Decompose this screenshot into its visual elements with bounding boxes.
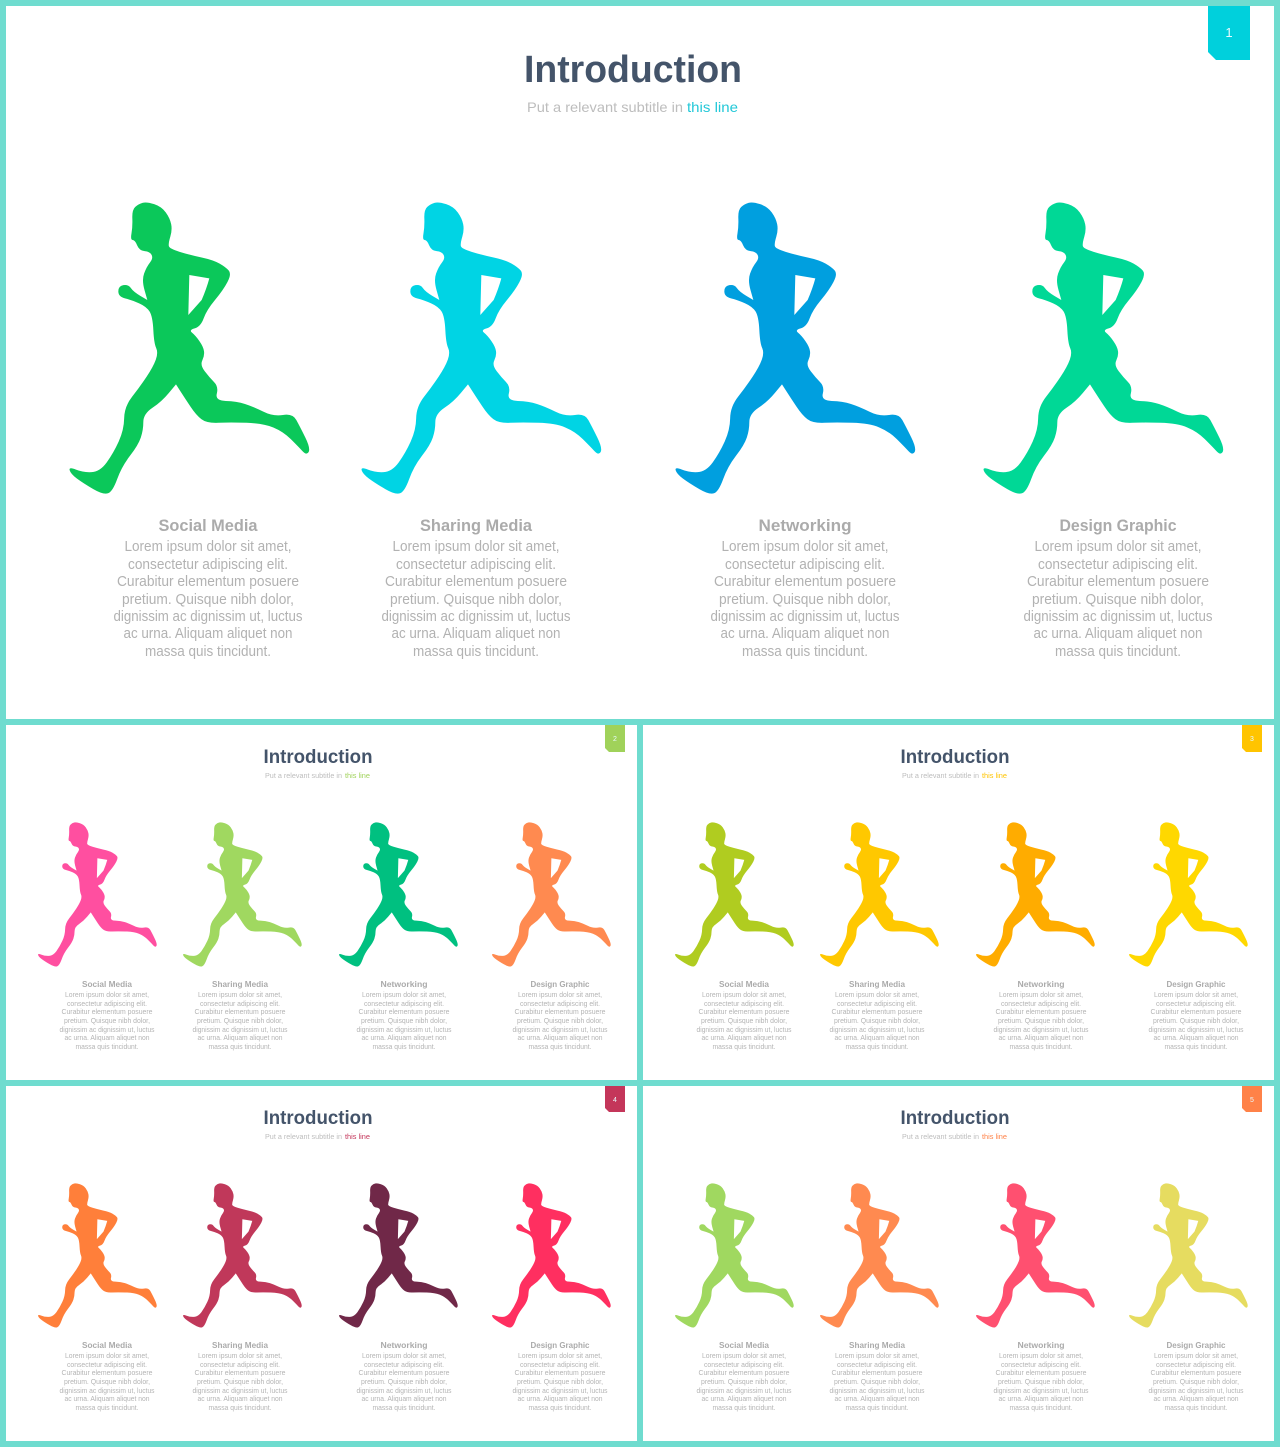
badge: slide number 2 <box>605 725 625 752</box>
text block: social media: Curabitur elementum posuere <box>698 1368 790 1377</box>
text block: networking: massa quis tincidunt. <box>1010 1403 1072 1412</box>
icon: runner social media <box>38 1183 157 1328</box>
icon: runner design graphic <box>492 1183 611 1328</box>
icon: runner sharing media <box>183 1183 302 1328</box>
text block: networking: Curabitur elementum posuere <box>714 574 896 590</box>
text block: networking <box>356 979 452 1051</box>
badge: slide number 1: 1 <box>1225 25 1233 40</box>
text block: social media: massa quis tincidunt. <box>712 1403 776 1412</box>
text block: social media <box>60 1340 155 1412</box>
text block: networking: dignissim ac dignissim ut, luctus <box>356 1025 452 1034</box>
text block: social media: ac urna. Aliquam aliquet non <box>702 1394 787 1403</box>
text block: design graphic: Design Graphic <box>1060 516 1176 535</box>
text block: networking: Lorem ipsum dolor sit amet, <box>999 990 1083 999</box>
text block: social media: Lorem ipsum dolor sit amet, <box>65 990 149 999</box>
text block: networking: Lorem ipsum dolor sit amet, <box>999 1351 1083 1360</box>
badge: slide number 4 <box>605 1086 625 1112</box>
text block: sharing media: Curabitur elementum posuere <box>194 1007 286 1016</box>
badge: slide number 2: 2 <box>613 736 617 743</box>
text block: social media: dignissim ac dignissim ut, luctus <box>114 609 302 625</box>
text block: sharing media: consectetur adipiscing elit. <box>396 557 556 573</box>
text block: sharing media: Sharing Media <box>849 1340 905 1350</box>
text block: design graphic: Lorem ipsum dolor sit amet, <box>518 990 602 999</box>
subtitle: Put a relevant subtitle in <box>265 1134 342 1141</box>
text block: sharing media: consectetur adipiscing elit. <box>837 1360 917 1369</box>
text block: sharing media: Sharing Media <box>849 979 905 989</box>
text block: design graphic <box>1024 516 1212 660</box>
text block: design graphic: massa quis tincidunt. <box>1164 1042 1228 1051</box>
text block: design graphic: dignissim ac dignissim ut, luctus <box>1148 1386 1244 1395</box>
text block: sharing media: pretium. Quisque nibh dolor, <box>197 1377 283 1386</box>
text block: sharing media: dignissim ac dignissim ut, luctus <box>192 1025 288 1034</box>
text block: networking: Networking <box>1018 1340 1064 1350</box>
text block: design graphic: Curabitur elementum posuere <box>514 1368 606 1377</box>
text block: sharing media: Lorem ipsum dolor sit amet, <box>835 990 919 999</box>
title: Introduction <box>900 747 1010 768</box>
text block: networking: dignissim ac dignissim ut, luctus <box>710 609 900 625</box>
panel: slide 5 <box>643 1086 1274 1441</box>
text block: sharing media: dignissim ac dignissim ut, luctus <box>192 1386 288 1395</box>
icon: runner social media <box>675 822 794 967</box>
icon: runner social media <box>70 202 309 494</box>
text block: social media: Lorem ipsum dolor sit amet, <box>702 990 786 999</box>
badge: slide number 1 <box>1208 6 1250 60</box>
text block: networking: ac urna. Aliquam aliquet non <box>720 626 890 642</box>
text block: sharing media: ac urna. Aliquam aliquet non <box>198 1033 283 1042</box>
text block: networking: ac urna. Aliquam aliquet non <box>998 1033 1084 1042</box>
text block: social media: pretium. Quisque nibh dolor, <box>701 1377 787 1386</box>
text block: design graphic: Curabitur elementum posuere <box>1150 1368 1242 1377</box>
subtitle: Put a relevant subtitle in <box>265 773 342 780</box>
text block: social media: massa quis tincidunt. <box>145 644 271 660</box>
text block: sharing media: Lorem ipsum dolor sit amet, <box>198 1351 282 1360</box>
text block: social media: massa quis tincidunt. <box>712 1042 776 1051</box>
text block: design graphic: Design Graphic <box>1166 1340 1226 1350</box>
text block: design graphic <box>512 979 608 1051</box>
text block: sharing media: massa quis tincidunt. <box>846 1042 908 1051</box>
icon: runner networking <box>676 202 915 494</box>
title: Introduction <box>900 1108 1010 1129</box>
text block: sharing media: ac urna. Aliquam aliquet non <box>392 626 560 642</box>
text block: social media: Social Media <box>719 979 769 989</box>
text block: social media: consectetur adipiscing elit. <box>128 557 288 573</box>
icon: runner networking <box>976 822 1095 967</box>
text block: sharing media <box>192 979 288 1051</box>
text block: social media <box>114 516 302 660</box>
text block: social media: Lorem ipsum dolor sit amet, <box>65 1351 149 1360</box>
text block: networking: Networking <box>758 516 852 535</box>
icon: runner networking <box>339 1183 458 1328</box>
text block: social media: Social Media <box>158 516 258 535</box>
text block: networking: pretium. Quisque nibh dolor, <box>998 1377 1084 1386</box>
text block: networking: consectetur adipiscing elit. <box>1001 1360 1081 1369</box>
icon: runner design graphic <box>492 822 611 967</box>
text block: social media: Social Media <box>719 1340 769 1350</box>
subtitle: this line <box>687 99 738 115</box>
text block: social media: Social Media <box>82 1340 132 1350</box>
icon: runner sharing media <box>362 202 601 494</box>
text block: design graphic: ac urna. Aliquam aliquet non <box>1154 1394 1239 1403</box>
text block: sharing media <box>192 1340 288 1412</box>
text block: sharing media: massa quis tincidunt. <box>208 1042 272 1051</box>
text block: networking: ac urna. Aliquam aliquet non <box>998 1394 1084 1403</box>
text block: social media: dignissim ac dignissim ut, luctus <box>696 1025 792 1034</box>
text block: design graphic: Lorem ipsum dolor sit amet, <box>1034 539 1202 555</box>
text block: social media <box>696 1340 792 1412</box>
text block: sharing media: ac urna. Aliquam aliquet non <box>834 1033 920 1042</box>
text block: networking: massa quis tincidunt. <box>372 1403 436 1412</box>
icon: runner design graphic <box>1129 1183 1248 1328</box>
text block: social media: Lorem ipsum dolor sit amet, <box>124 539 292 555</box>
icon: runner design graphic <box>1129 822 1248 967</box>
text block: networking <box>710 516 900 660</box>
text block: networking: massa quis tincidunt. <box>372 1042 436 1051</box>
text block: networking: consectetur adipiscing elit. <box>1001 999 1081 1008</box>
text block: design graphic: dignissim ac dignissim ut, luctus <box>512 1025 608 1034</box>
text block: networking: Curabitur elementum posuere <box>996 1368 1086 1377</box>
subtitle: Put a relevant subtitle in <box>902 773 979 780</box>
text block: sharing media: Sharing Media <box>212 979 268 989</box>
icon: runner networking <box>976 1183 1095 1328</box>
text block: networking: Lorem ipsum dolor sit amet, <box>722 539 888 555</box>
text block: social media: Curabitur elementum posuere <box>117 574 299 590</box>
text block: design graphic: ac urna. Aliquam aliquet non <box>518 1033 603 1042</box>
text block: design graphic: dignissim ac dignissim ut, luctus <box>1024 609 1212 625</box>
text block: design graphic: ac urna. Aliquam aliquet non <box>518 1394 603 1403</box>
text block: design graphic: Design Graphic <box>530 979 590 989</box>
text block: design graphic: Curabitur elementum posuere <box>514 1007 606 1016</box>
text block: networking: dignissim ac dignissim ut, luctus <box>994 1025 1089 1034</box>
text block: networking: dignissim ac dignissim ut, luctus <box>356 1386 452 1395</box>
text block: networking: ac urna. Aliquam aliquet non <box>362 1033 447 1042</box>
text block: networking: Curabitur elementum posuere <box>358 1007 450 1016</box>
text block: sharing media: Curabitur elementum posuere <box>194 1368 286 1377</box>
text block: design graphic: pretium. Quisque nibh dolor, <box>1032 592 1204 608</box>
text block: design graphic: massa quis tincidunt. <box>528 1403 592 1412</box>
badge: slide number 3: 3 <box>1250 736 1254 743</box>
text block: networking: Lorem ipsum dolor sit amet, <box>362 990 446 999</box>
icon: runner design graphic <box>984 202 1223 494</box>
text block: sharing media: dignissim ac dignissim ut, luctus <box>382 609 570 625</box>
text block: sharing media: pretium. Quisque nibh dolor, <box>834 1016 920 1025</box>
title: Introduction <box>264 1108 372 1129</box>
title: Introduction <box>264 747 372 768</box>
text block: sharing media: consectetur adipiscing elit. <box>200 999 280 1008</box>
text block: sharing media: massa quis tincidunt. <box>846 1403 908 1412</box>
badge: slide number 5 <box>1242 1086 1262 1112</box>
text block: design graphic: Design Graphic <box>530 1340 590 1350</box>
text block: social media: consectetur adipiscing elit. <box>67 999 147 1008</box>
text block: networking: massa quis tincidunt. <box>742 644 868 660</box>
text block: social media: ac urna. Aliquam aliquet non <box>124 626 292 642</box>
text block: networking: dignissim ac dignissim ut, luctus <box>994 1386 1089 1395</box>
text block: design graphic: consectetur adipiscing elit. <box>1038 557 1198 573</box>
text block: design graphic: consectetur adipiscing elit. <box>1156 1360 1236 1369</box>
text block: design graphic: consectetur adipiscing elit. <box>520 999 600 1008</box>
text block: design graphic <box>512 1340 608 1412</box>
text block: networking: pretium. Quisque nibh dolor, <box>361 1377 447 1386</box>
text block: design graphic: Design Graphic <box>1166 979 1226 989</box>
subtitle: this line <box>982 1134 1007 1141</box>
text block: sharing media: pretium. Quisque nibh dolor, <box>197 1016 283 1025</box>
text block: social media: dignissim ac dignissim ut, luctus <box>60 1025 155 1034</box>
panel: slide 3 <box>643 725 1274 1080</box>
text block: sharing media: Curabitur elementum posuere <box>832 1007 922 1016</box>
text block: design graphic: consectetur adipiscing elit. <box>1156 999 1236 1008</box>
text block: sharing media: Curabitur elementum posuere <box>832 1368 922 1377</box>
text block: social media <box>696 979 792 1051</box>
badge: slide number 5: 5 <box>1250 1097 1254 1104</box>
text block: design graphic <box>1148 979 1244 1051</box>
text block: design graphic: massa quis tincidunt. <box>528 1042 592 1051</box>
text block: networking: consectetur adipiscing elit. <box>364 1360 444 1369</box>
icon: runner social media <box>675 1183 794 1328</box>
text block: networking: ac urna. Aliquam aliquet non <box>362 1394 447 1403</box>
text block: networking <box>994 1340 1089 1412</box>
panel: slide 2 <box>6 725 637 1080</box>
text block: social media: pretium. Quisque nibh dolor, <box>64 1016 150 1025</box>
text block: networking: pretium. Quisque nibh dolor, <box>361 1016 447 1025</box>
text block: design graphic: pretium. Quisque nibh dolor, <box>517 1016 603 1025</box>
text block: social media: pretium. Quisque nibh dolor, <box>122 592 294 608</box>
subtitle: this line <box>982 773 1007 780</box>
text block: sharing media: massa quis tincidunt. <box>413 644 539 660</box>
text block: design graphic: dignissim ac dignissim ut, luctus <box>512 1386 608 1395</box>
text block: networking: pretium. Quisque nibh dolor, <box>998 1016 1084 1025</box>
text block: design graphic: dignissim ac dignissim ut, luctus <box>1148 1025 1244 1034</box>
text block: design graphic: Curabitur elementum posuere <box>1027 574 1209 590</box>
text block: social media <box>60 979 155 1051</box>
badge: slide number 3 <box>1242 725 1262 752</box>
text block: sharing media: Curabitur elementum posuere <box>385 574 567 590</box>
icon: runner sharing media <box>183 822 302 967</box>
text block: sharing media: ac urna. Aliquam aliquet non <box>198 1394 283 1403</box>
text block: networking <box>356 1340 452 1412</box>
text block: social media: pretium. Quisque nibh dolor, <box>64 1377 150 1386</box>
text block: sharing media: pretium. Quisque nibh dolor, <box>390 592 562 608</box>
text block: networking: consectetur adipiscing elit. <box>725 557 885 573</box>
text block: networking: Curabitur elementum posuere <box>358 1368 450 1377</box>
text block: sharing media: dignissim ac dignissim ut, luctus <box>830 1025 925 1034</box>
text block: design graphic: ac urna. Aliquam aliquet non <box>1034 626 1202 642</box>
icon: runner social media <box>38 822 157 967</box>
icon: runner sharing media <box>820 822 939 967</box>
icon: runner networking <box>339 822 458 967</box>
text block: social media: dignissim ac dignissim ut, luctus <box>696 1386 792 1395</box>
text block: social media: Curabitur elementum posuere <box>62 1368 152 1377</box>
text block: design graphic: pretium. Quisque nibh dolor, <box>1153 1016 1239 1025</box>
text block: social media: Curabitur elementum posuere <box>62 1007 152 1016</box>
text block: design graphic: pretium. Quisque nibh dolor, <box>1153 1377 1239 1386</box>
subtitle: Put a relevant subtitle in <box>902 1134 979 1141</box>
text block: social media: consectetur adipiscing elit. <box>704 1360 784 1369</box>
subtitle: this line <box>345 1134 370 1141</box>
text block: social media: Curabitur elementum posuere <box>698 1007 790 1016</box>
text block: social media: consectetur adipiscing elit. <box>67 1360 147 1369</box>
text block: sharing media: ac urna. Aliquam aliquet non <box>834 1394 920 1403</box>
text block: design graphic: massa quis tincidunt. <box>1055 644 1181 660</box>
text block: networking: consectetur adipiscing elit. <box>364 999 444 1008</box>
text block: networking: Networking <box>1018 979 1064 989</box>
text block: networking: Networking <box>380 979 428 989</box>
text block: design graphic: ac urna. Aliquam aliquet non <box>1154 1033 1239 1042</box>
text block: social media: consectetur adipiscing elit. <box>704 999 784 1008</box>
text block: social media: ac urna. Aliquam aliquet non <box>64 1394 150 1403</box>
text block: sharing media: Lorem ipsum dolor sit amet, <box>392 539 560 555</box>
text block: networking: massa quis tincidunt. <box>1010 1042 1072 1051</box>
text block: social media: dignissim ac dignissim ut, luctus <box>60 1386 155 1395</box>
text block: sharing media: consectetur adipiscing elit. <box>200 1360 280 1369</box>
text block: social media: ac urna. Aliquam aliquet non <box>702 1033 787 1042</box>
text block: sharing media: pretium. Quisque nibh dolor, <box>834 1377 920 1386</box>
text block: networking: Curabitur elementum posuere <box>996 1007 1086 1016</box>
text block: social media: ac urna. Aliquam aliquet non <box>64 1033 150 1042</box>
badge: slide number 4: 4 <box>613 1097 617 1104</box>
icon: runner sharing media <box>820 1183 939 1328</box>
text block: design graphic: Lorem ipsum dolor sit amet, <box>1154 990 1238 999</box>
text block: networking: pretium. Quisque nibh dolor, <box>719 592 891 608</box>
text block: social media: massa quis tincidunt. <box>76 1403 138 1412</box>
text block: networking: Networking <box>380 1340 428 1350</box>
text block: sharing media <box>382 516 570 660</box>
text block: social media: massa quis tincidunt. <box>76 1042 138 1051</box>
text block: social media: Social Media <box>82 979 132 989</box>
text block: design graphic: Lorem ipsum dolor sit amet, <box>518 1351 602 1360</box>
subtitle: Put a relevant subtitle in <box>527 99 683 115</box>
text block: sharing media: Sharing Media <box>420 516 533 535</box>
text block: design graphic: consectetur adipiscing elit. <box>520 1360 600 1369</box>
text block: design graphic: Lorem ipsum dolor sit amet, <box>1154 1351 1238 1360</box>
text block: social media: Lorem ipsum dolor sit amet, <box>702 1351 786 1360</box>
text block: sharing media: Sharing Media <box>212 1340 268 1350</box>
text block: sharing media <box>830 979 925 1051</box>
text block: sharing media: dignissim ac dignissim ut, luctus <box>830 1386 925 1395</box>
text block: design graphic: pretium. Quisque nibh dolor, <box>517 1377 603 1386</box>
panel: main slide <box>6 6 1274 719</box>
text block: sharing media <box>830 1340 925 1412</box>
text block: social media: pretium. Quisque nibh dolor, <box>701 1016 787 1025</box>
text block: networking: Lorem ipsum dolor sit amet, <box>362 1351 446 1360</box>
text block: design graphic <box>1148 1340 1244 1412</box>
text block: sharing media: Lorem ipsum dolor sit amet, <box>198 990 282 999</box>
text block: design graphic: massa quis tincidunt. <box>1164 1403 1228 1412</box>
text block: sharing media: Lorem ipsum dolor sit amet, <box>835 1351 919 1360</box>
text block: networking <box>994 979 1089 1051</box>
text block: sharing media: massa quis tincidunt. <box>208 1403 272 1412</box>
text block: sharing media: consectetur adipiscing elit. <box>837 999 917 1008</box>
text block: design graphic: Curabitur elementum posuere <box>1150 1007 1242 1016</box>
subtitle: this line <box>345 773 370 780</box>
panel: slide 4 <box>6 1086 637 1441</box>
title: Introduction <box>524 49 742 91</box>
